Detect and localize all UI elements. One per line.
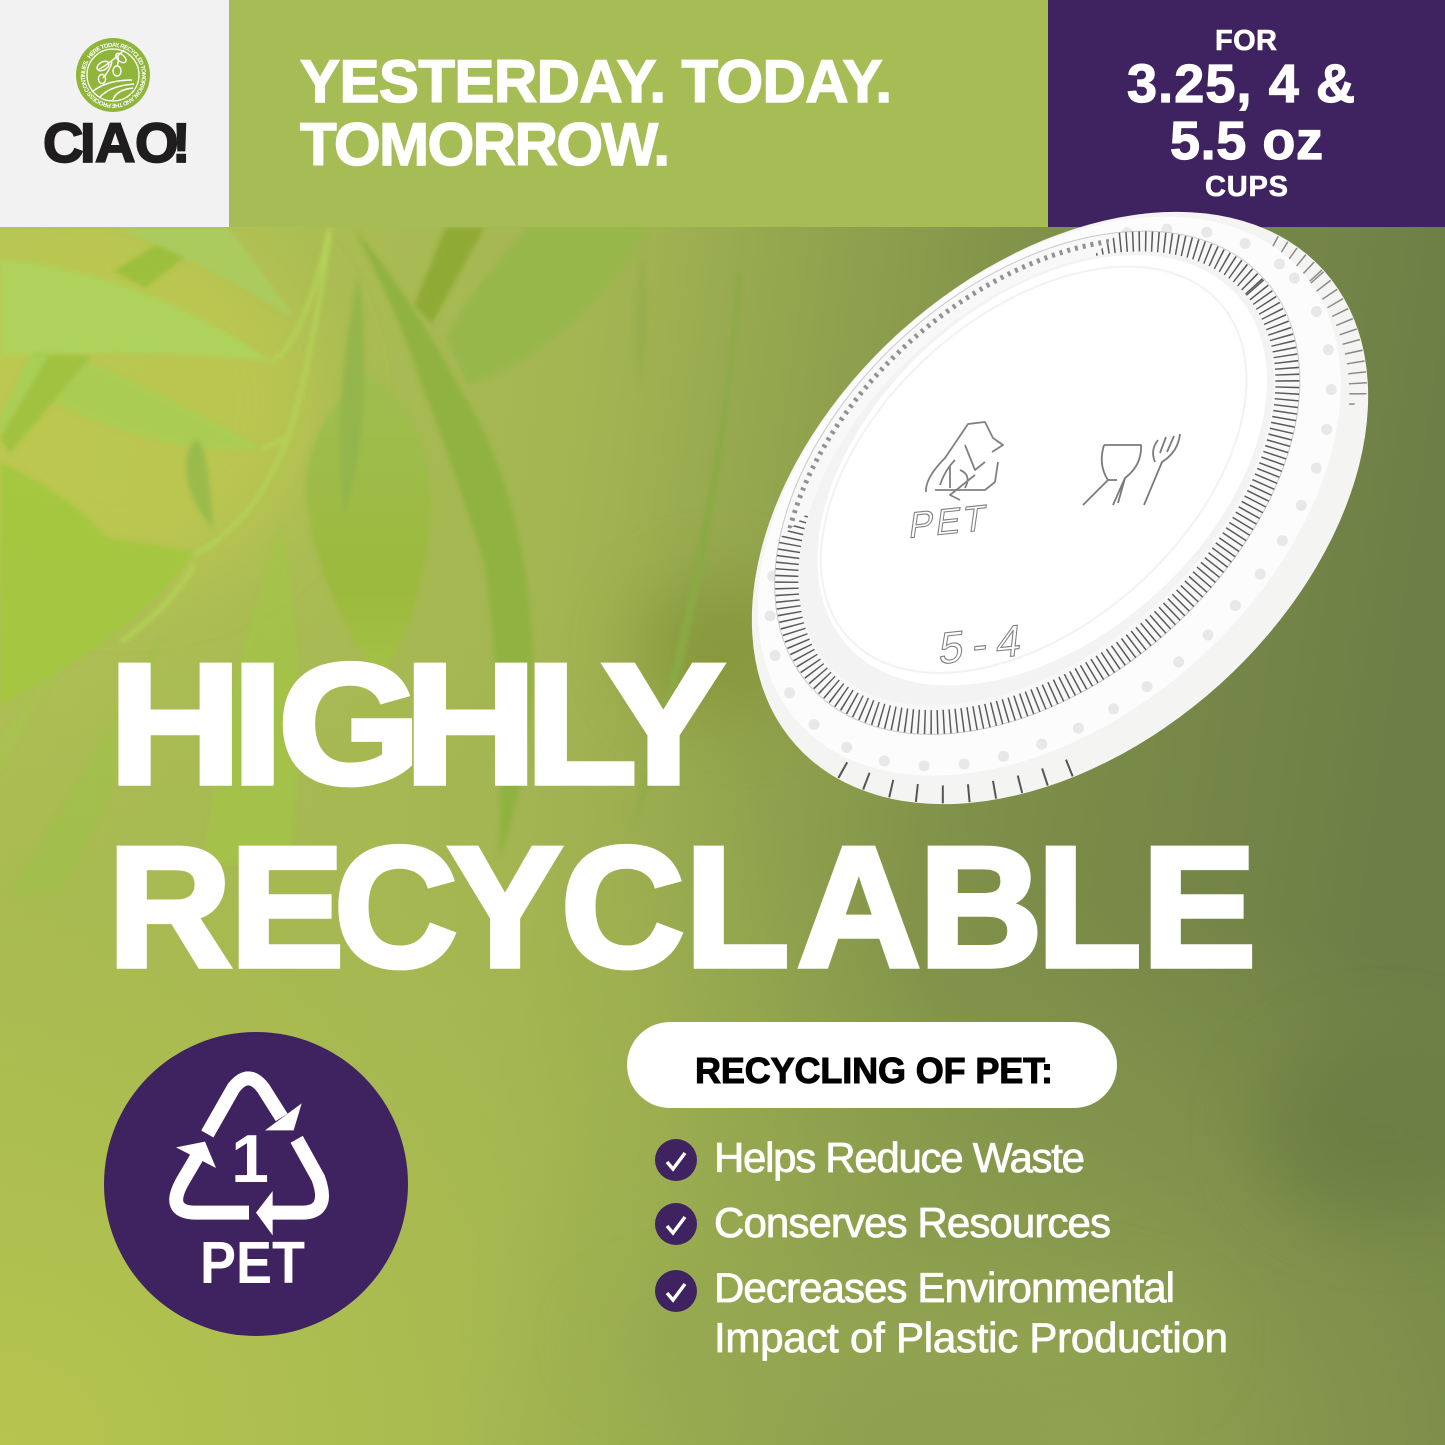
embossed mold number: 5-4: [937, 616, 1024, 674]
embossed recycling mark: [926, 422, 1003, 500]
cup sizes text: CUPS: [1205, 171, 1288, 203]
benefit: helps reduce waste: Helps Reduce Waste: [714, 1134, 1085, 1181]
tagline: [300, 48, 892, 178]
icon: recycling triangle: [176, 1078, 322, 1235]
benefits list: [655, 1134, 1228, 1361]
PET recycling badge: [104, 1032, 408, 1336]
logo wordmark: CIAO!: [43, 111, 191, 174]
logo emblem: HERE TODAY, RECYCLED TOMORROW, AND THE PROCESS CONTINUES.: [80, 42, 146, 108]
PET label: PET: [200, 1230, 305, 1296]
headline: [108, 628, 1256, 1003]
header: cup sizes panel: [1048, 0, 1445, 227]
cup sizes text: FOR: [1215, 25, 1277, 57]
clear PET lid product image: [752, 212, 1368, 804]
benefit: decreases environmental impact: Impact of Plastic Production: [714, 1314, 1228, 1361]
pill heading: recycling of PET: [627, 1022, 1117, 1108]
benefit: conserves resources: Conserves Resources: [714, 1199, 1111, 1246]
cup sizes text: 3.25, 4 &: [1127, 54, 1355, 114]
headline: RECYCLABLE: [108, 812, 1256, 1003]
embossed PET text: PET: [907, 497, 988, 546]
tagline: YESTERDAY. TODAY.: [300, 48, 892, 115]
tagline: TOMORROW.: [300, 111, 670, 178]
recycling code number: 1: [231, 1121, 269, 1197]
pill heading: recycling of PET: RECYCLING OF PET:: [695, 1050, 1053, 1091]
header: logo panel: [0, 0, 229, 227]
cup sizes text: 5.5 oz: [1170, 111, 1323, 171]
headline: HIGHLY: [109, 628, 724, 820]
embossed food-safe mark: [1083, 434, 1180, 505]
cup sizes text: [1127, 25, 1355, 203]
benefit: decreases environmental impact: [655, 1264, 1228, 1361]
benefit: decreases environmental impact: Decreases Environmental: [714, 1264, 1175, 1311]
header: tagline band: [229, 0, 1048, 227]
